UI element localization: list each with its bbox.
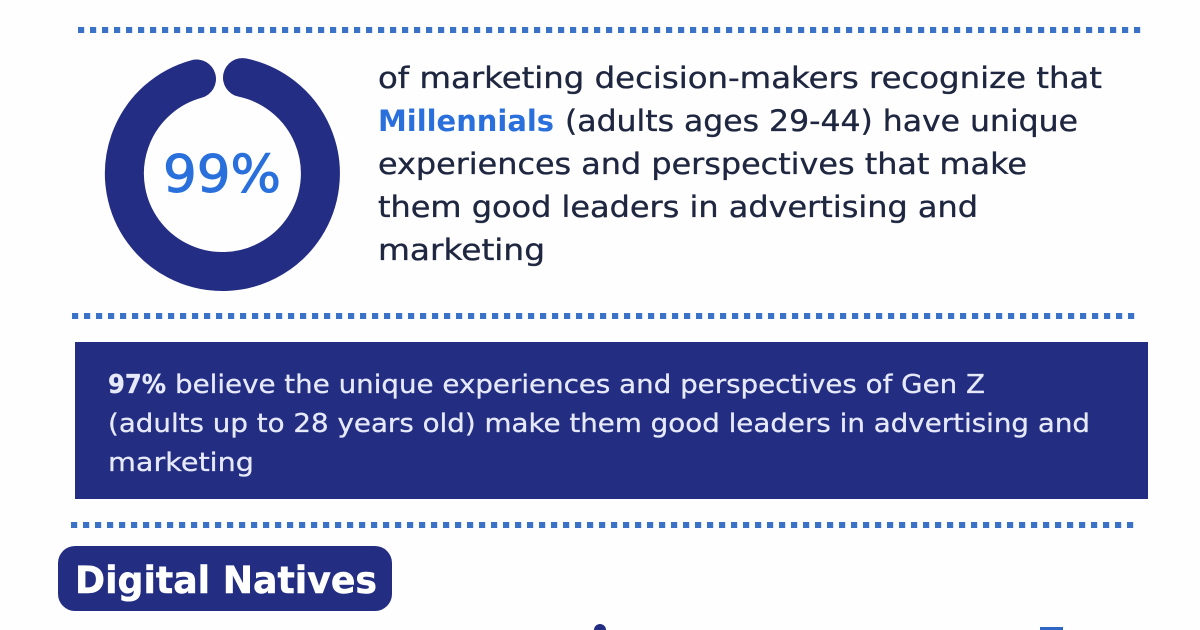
- donut value: 99%: [163, 145, 281, 205]
- text block: Millennials statistic: [378, 61, 1102, 267]
- banner text: believe the unique experiences and perspectives of Gen Z: [175, 370, 985, 400]
- heading: Digital Natives: Digital Natives: [75, 559, 377, 602]
- icon: cropped icon top, centre: [594, 624, 606, 630]
- text block: Millennials statistic: of marketing decision-makers recognize that: [378, 61, 1102, 95]
- text block: Millennials statistic: marketing: [378, 233, 545, 267]
- banner text: [108, 370, 1090, 478]
- heading: Digital Natives: [58, 546, 392, 611]
- text block: Millennials statistic: them good leaders in advertising and: [378, 190, 978, 224]
- banner text: marketing: [108, 448, 254, 478]
- banner text: 97%: [108, 370, 166, 400]
- text block: Millennials statistic: (adults ages 29-44) have unique: [565, 104, 1078, 138]
- text block: Millennials statistic: Millennials: [378, 104, 554, 138]
- panel: Gen Z statistic banner: [75, 342, 1148, 499]
- banner text: (adults up to 28 years old) make them good leaders in advertising and: [108, 409, 1090, 439]
- text block: Millennials statistic: experiences and perspectives that make: [378, 147, 1027, 181]
- donut chart: 99%: [124, 78, 320, 272]
- icon: cropped icon top, right: [1040, 627, 1063, 630]
